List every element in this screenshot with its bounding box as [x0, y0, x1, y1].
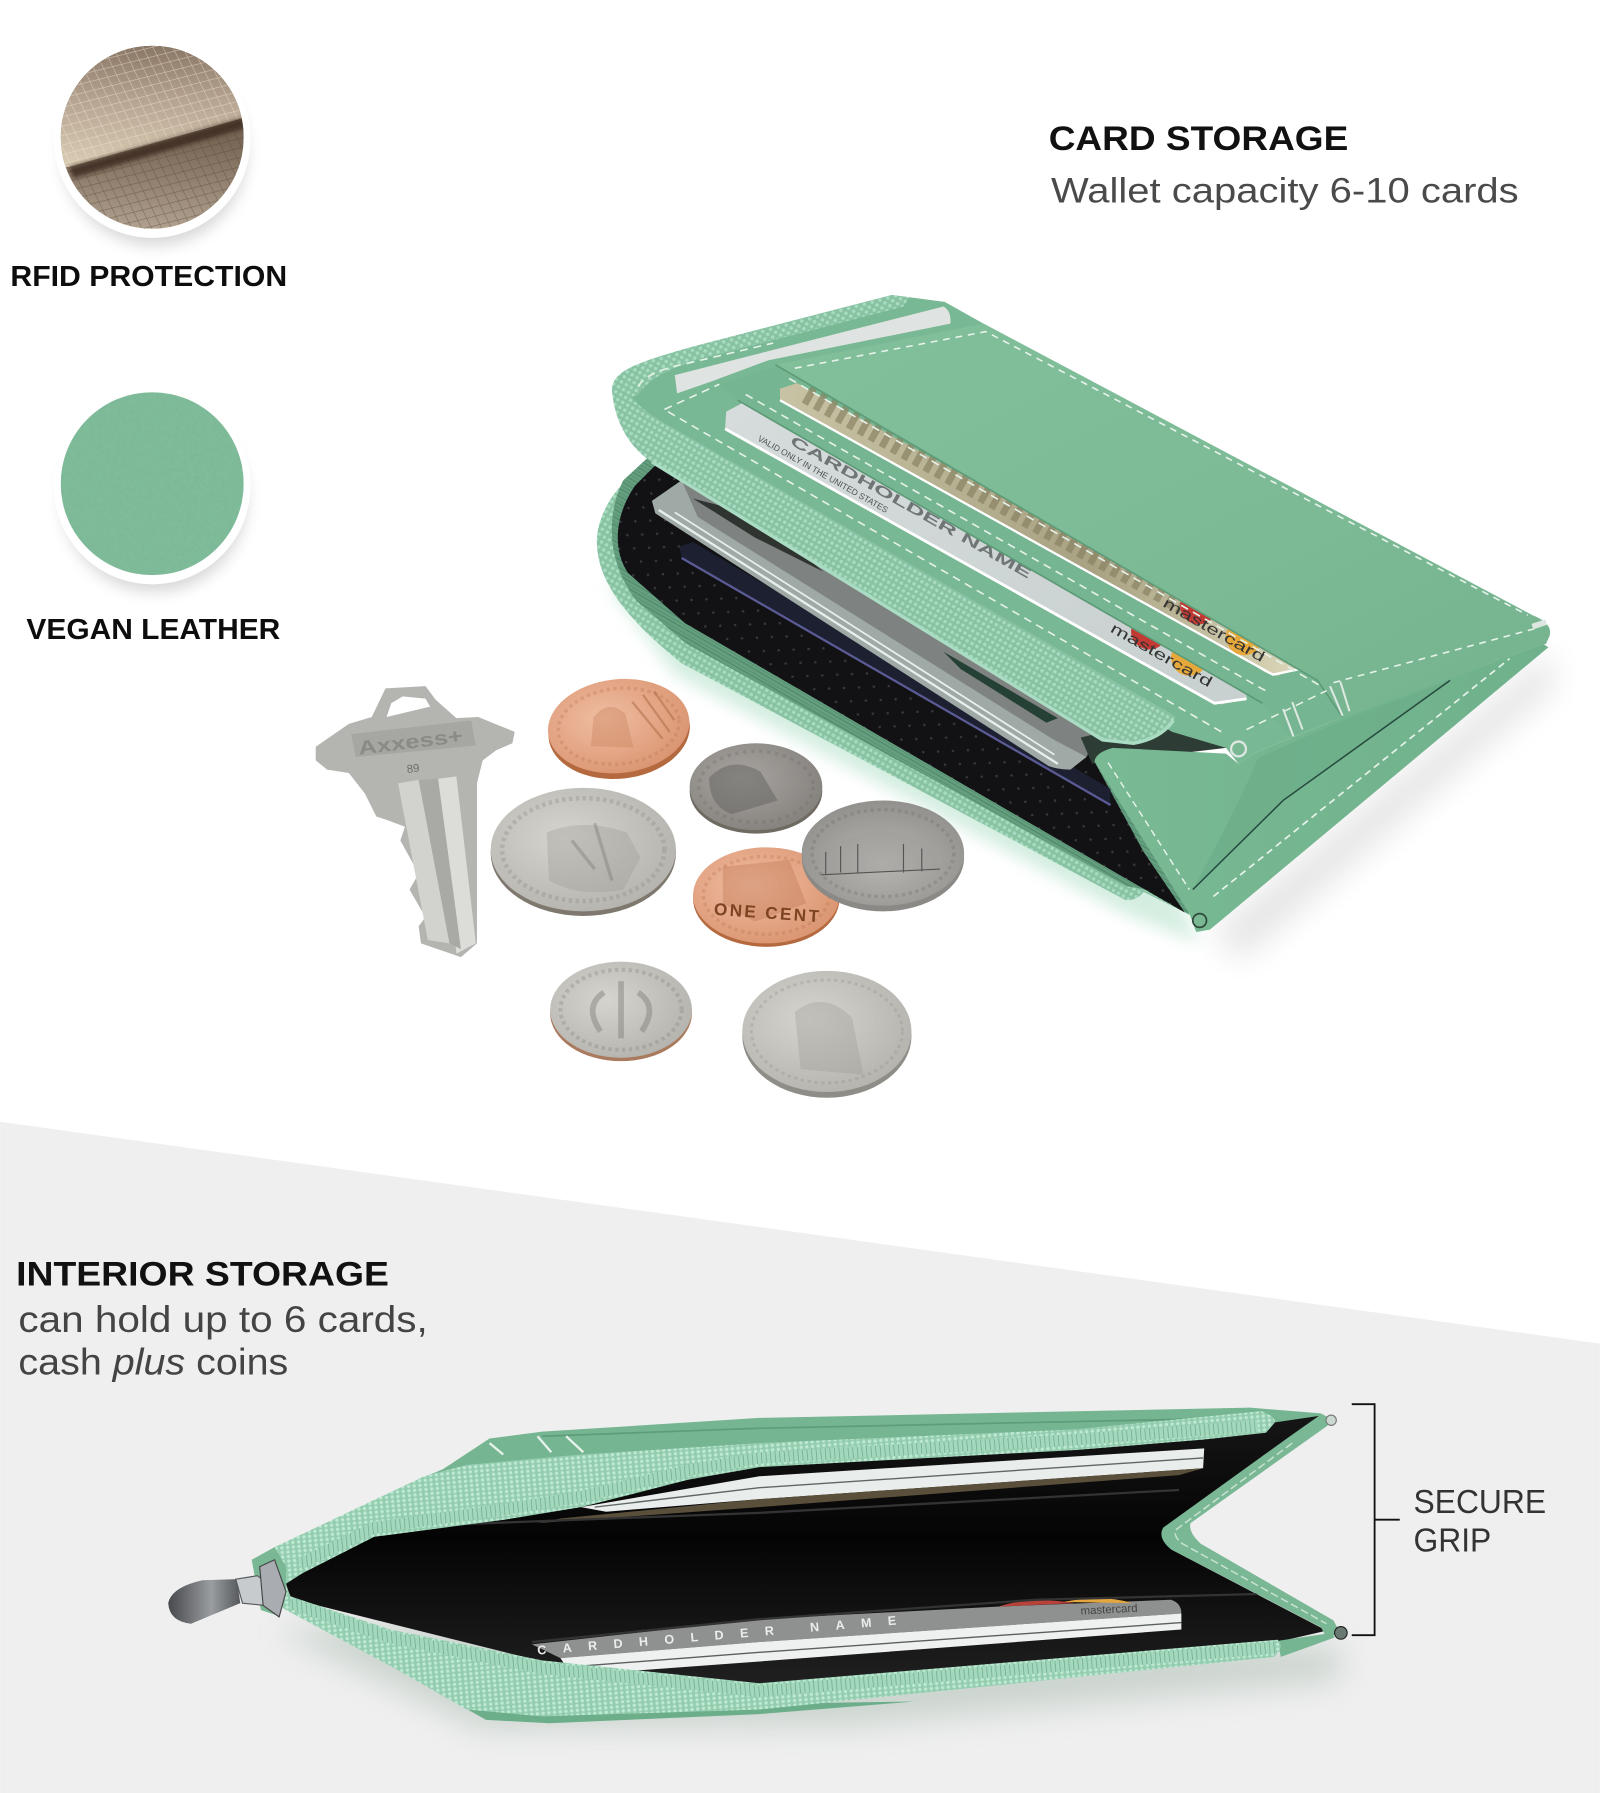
large front pocket	[775, 324, 1550, 717]
back card	[675, 306, 951, 393]
label: secure grip: GRIP	[1413, 1523, 1491, 1560]
photo: coins	[491, 672, 964, 1098]
beige card	[780, 383, 1300, 676]
heading: interior storage	[16, 1255, 428, 1382]
lower compartment zipper	[597, 463, 1189, 915]
upper wallet body	[612, 295, 1550, 764]
grey background band	[0, 1122, 1600, 1793]
panel: vegan leather swatch	[54, 388, 251, 591]
black interior	[286, 1416, 1327, 1686]
coin: penny back	[543, 672, 695, 786]
silver card: mastercard	[1107, 621, 1215, 691]
silver card: CARDHOLDER NAME	[788, 433, 1034, 581]
lower compartment green lining	[612, 452, 1189, 915]
label: RFID protection: RFID PROTECTION	[10, 261, 287, 293]
banknotes and receipts	[652, 480, 1098, 770]
pocket stitching	[638, 343, 1327, 732]
beige card: mastercard	[1160, 596, 1267, 666]
heading: card storage	[1049, 120, 1519, 210]
bracket: secure grip	[1352, 1404, 1400, 1635]
bottom green trim	[458, 1702, 915, 1723]
wallet interior lining	[618, 452, 1185, 913]
purple card	[679, 542, 1110, 805]
dark gap behind flap	[1081, 715, 1226, 764]
label: vegan leather: VEGAN LEATHER	[26, 614, 281, 646]
photo: open wallet front view	[168, 1408, 1347, 1729]
back green rim	[423, 1408, 1333, 1487]
photo: key: 89	[406, 763, 420, 776]
panel: RFID protection swatch	[54, 41, 251, 245]
coin: one cent penny: ONE CENT	[713, 899, 820, 926]
front cards: CARDHOLDER NAME	[537, 1614, 897, 1658]
photo: open wallet top view	[597, 295, 1555, 961]
coin: one cent penny	[693, 847, 839, 947]
wallet shadow	[275, 1624, 1344, 1729]
zipper pull	[168, 1560, 286, 1624]
bottom right green rim	[1277, 1633, 1335, 1657]
middle pocket strip	[719, 366, 1343, 736]
back cards	[538, 1448, 1204, 1523]
photo: key	[316, 686, 515, 957]
heading: interior storage: cash plus coins	[18, 1341, 288, 1382]
photo: key: Axxess+	[357, 725, 464, 760]
top zipper lighter edge	[652, 462, 1173, 743]
right gusset	[1161, 1415, 1347, 1639]
front cards: mastercard	[1080, 1603, 1138, 1618]
front pocket corner rivet and tabs	[1231, 682, 1349, 756]
heading: interior storage: INTERIOR STORAGE	[16, 1255, 389, 1293]
coin: quarter	[491, 788, 676, 916]
heading: card storage: Wallet capacity 6-10 cards	[1051, 170, 1519, 210]
wallet soft shadows	[606, 583, 1555, 961]
top zipper	[272, 1411, 1275, 1584]
inner fold sheen	[458, 1490, 1179, 1524]
coin: dime front	[550, 962, 692, 1061]
silver card: VALID ONLY IN THE UNITED STATES	[756, 433, 890, 515]
label: secure grip	[1413, 1484, 1546, 1560]
front fold line	[532, 1594, 1258, 1642]
heading: card storage: CARD STORAGE	[1049, 120, 1348, 158]
label: secure grip: SECURE	[1413, 1484, 1546, 1521]
zipper end cap	[252, 1547, 286, 1615]
upper zipper rim	[612, 295, 909, 400]
top zipper band	[612, 382, 1176, 743]
front cards	[532, 1598, 1181, 1675]
bottom zipper	[272, 1585, 1281, 1716]
coin: dark dime	[690, 743, 822, 834]
top zipper teeth	[300, 1426, 1258, 1564]
back rim pocket seam	[490, 1418, 1247, 1455]
coin: nickel back	[802, 800, 964, 911]
heading: interior storage: can hold up to 6 cards,	[18, 1299, 428, 1340]
bottom zipper teeth	[291, 1603, 1275, 1691]
coin: nickel front	[742, 971, 911, 1098]
outer green flap	[1094, 644, 1548, 932]
silver card	[725, 403, 1247, 704]
